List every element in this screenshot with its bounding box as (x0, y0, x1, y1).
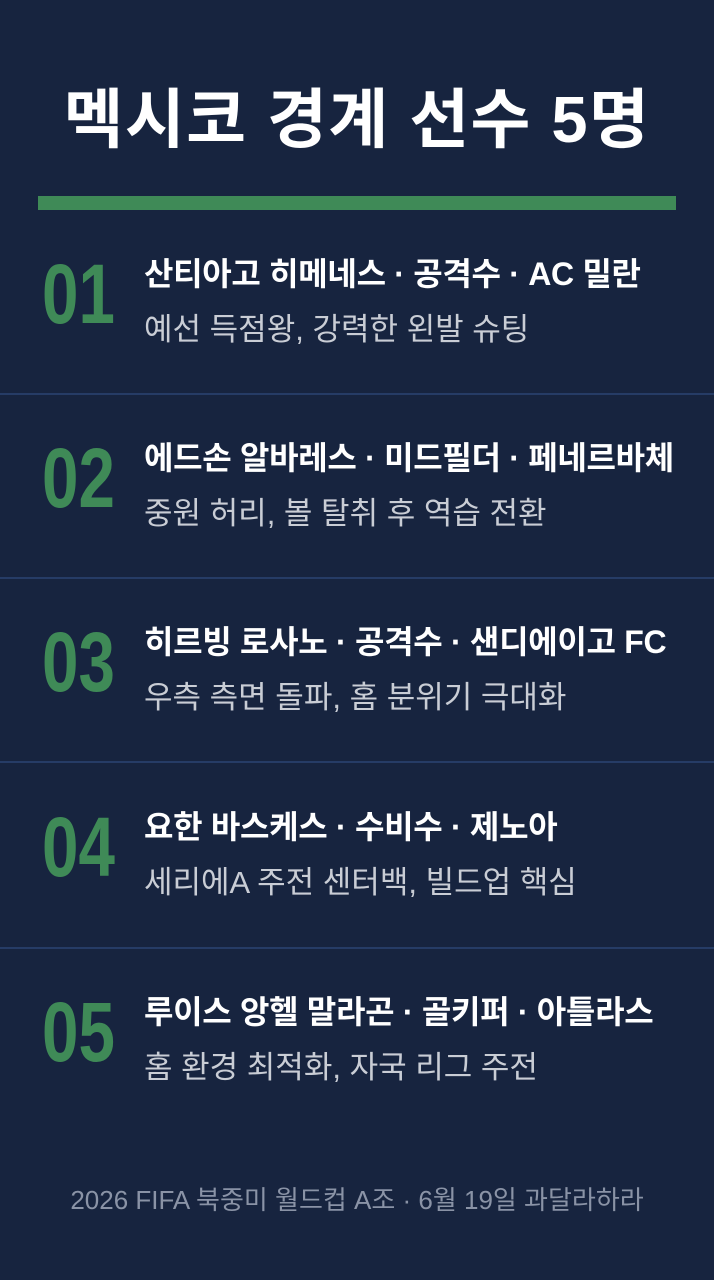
desc 04: 세리에A 주전 센터백, 빌드업 핵심 (144, 865, 577, 900)
desc 02: 중원 허리, 볼 탈취 후 역습 전환 (144, 496, 547, 531)
desc 05: 홈 환경 최적화, 자국 리그 주전 (144, 1050, 538, 1085)
name 01: 산티아고 히메네스 · 공격수 · AC 밀란 (144, 256, 641, 292)
desc 03: 우측 측면 돌파, 홈 분위기 극대화 (144, 680, 566, 715)
player 05 (42, 985, 653, 1085)
player 01 (42, 247, 641, 347)
player 03 (42, 615, 666, 715)
name 03: 히르빙 로사노 · 공격수 · 샌디에이고 FC (144, 624, 666, 660)
green bar (38, 196, 676, 210)
desc 01: 예선 득점왕, 강력한 왼발 슈팅 (144, 312, 529, 347)
player 02 (42, 431, 674, 531)
number 05: 05 (42, 985, 115, 1079)
player 04 (42, 800, 577, 900)
number 04: 04 (42, 800, 115, 894)
number 01: 01 (42, 247, 115, 341)
name 04: 요한 바스케스 · 수비수 · 제노아 (144, 809, 557, 845)
footer: 2026 FIFA 북중미 월드컵 A조 · 6월 19일 과달라하라 (70, 1185, 644, 1215)
title: 멕시코 경계 선수 5명 (64, 83, 650, 156)
number 02: 02 (42, 431, 115, 525)
name 02: 에드손 알바레스 · 미드필더 · 페네르바체 (144, 440, 674, 476)
number 03: 03 (42, 615, 115, 709)
name 05: 루이스 앙헬 말라곤 · 골키퍼 · 아틀라스 (144, 994, 653, 1030)
